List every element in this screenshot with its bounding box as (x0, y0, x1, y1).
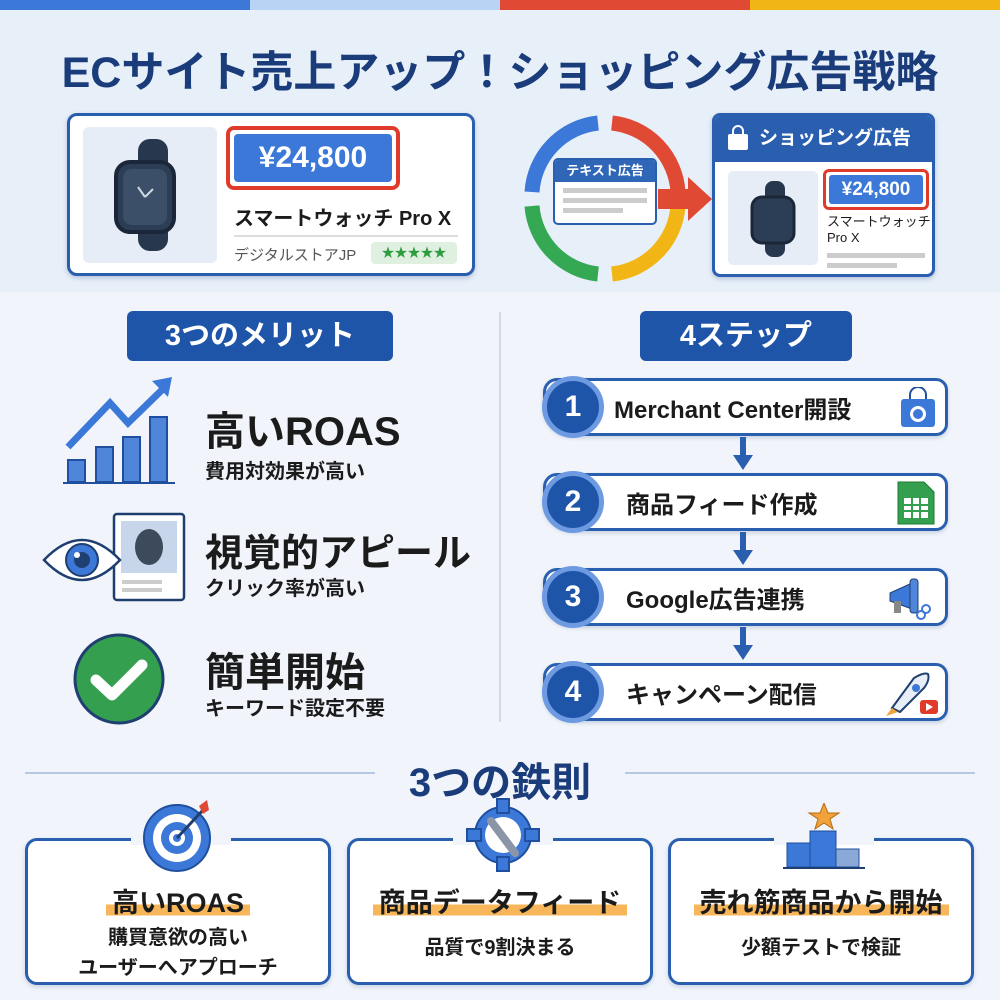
arrow down (733, 532, 753, 565)
step 3 (543, 568, 948, 626)
text: 3つの鉄則 (409, 761, 591, 805)
watch image (83, 127, 217, 263)
step 1: 1 (565, 390, 581, 423)
icon: shopping bag (901, 387, 935, 427)
merit 3: easy start (74, 634, 385, 724)
product name: スマートウォッチ Pro X (234, 208, 451, 230)
icon: spreadsheet (898, 482, 934, 524)
product card (67, 113, 475, 276)
divider (499, 312, 501, 722)
price tag (226, 126, 400, 190)
small price (823, 169, 929, 210)
arrow down (733, 437, 753, 470)
text ad card (553, 158, 657, 225)
rule card 1: ユーザーへアプローチ (78, 957, 278, 979)
step 1: Merchant Center開設 (614, 397, 851, 424)
step 3: 3 (565, 580, 581, 613)
small watch (728, 171, 818, 265)
rule card 3: 売れ筋商品から開始 (700, 888, 942, 918)
icon: podium with star (783, 803, 865, 869)
merit 3: easy start: キーワード設定不要 (205, 698, 385, 720)
icon: check (74, 634, 164, 724)
rule card 2: 商品データフィード (379, 888, 621, 918)
step 2 (543, 473, 948, 531)
step 4: キャンペーン配信 (626, 682, 817, 709)
store and rating: デジタルストアJP (234, 247, 356, 264)
small price: ¥24,800 (842, 179, 910, 200)
google ring with text ad (524, 116, 686, 282)
rules heading (25, 772, 975, 774)
merit 2: visual appeal: クリック率が高い (205, 578, 365, 600)
icon: megaphone (890, 578, 931, 620)
merits heading (127, 311, 393, 361)
icon: gear wrench (466, 798, 540, 872)
top color bar (0, 0, 1000, 10)
price tag: ¥24,800 (259, 141, 367, 174)
shopping ad card: Pro X (827, 230, 860, 245)
merit 2: visual appeal (42, 512, 471, 602)
merits heading: 3つのメリット (165, 320, 355, 352)
arrow: red (658, 177, 712, 221)
step 2: 商品フィード作成 (626, 492, 818, 519)
rule card 2: 品質で9割決まる (424, 937, 576, 959)
step 1 (543, 378, 948, 436)
header background (0, 10, 1000, 292)
icon: rocket (886, 672, 938, 716)
icon: target (143, 800, 211, 872)
merit 1: high ROAS (63, 377, 401, 484)
step 4: 4 (565, 675, 581, 708)
icon: growth chart (63, 377, 175, 484)
merit 1: high ROAS: 費用対効果が高い (205, 461, 365, 483)
steps heading: 4ステップ (680, 320, 812, 352)
step 4 (543, 663, 948, 721)
rule card 2 (347, 838, 653, 985)
text: 視覚的アピール (205, 533, 471, 575)
step 3: Google広告連携 (626, 587, 805, 614)
icon: eye and product (42, 512, 186, 602)
title: ECサイト売上アップ！ショッピング広告戦略 (62, 49, 938, 97)
text ad card: テキスト広告 (566, 163, 644, 178)
rule card 1: 購買意欲の高い (108, 927, 248, 949)
header: ショッピング広告 (759, 128, 911, 149)
rule card 3: 少額テストで検証 (741, 937, 901, 959)
step 2: 2 (565, 485, 581, 518)
steps heading (640, 311, 852, 361)
rule card 1: 高いROAS (112, 888, 244, 918)
product card: ★★★★★ (381, 245, 446, 260)
shopping ad card (712, 113, 935, 277)
rule card 3 (668, 838, 974, 985)
rule card 1 (25, 838, 331, 985)
header (715, 116, 932, 162)
text: 簡単開始 (205, 651, 365, 695)
arrow down (733, 627, 753, 660)
shopping ad card: スマートウォッチ (827, 214, 931, 229)
text: 高いROAS (205, 410, 401, 454)
